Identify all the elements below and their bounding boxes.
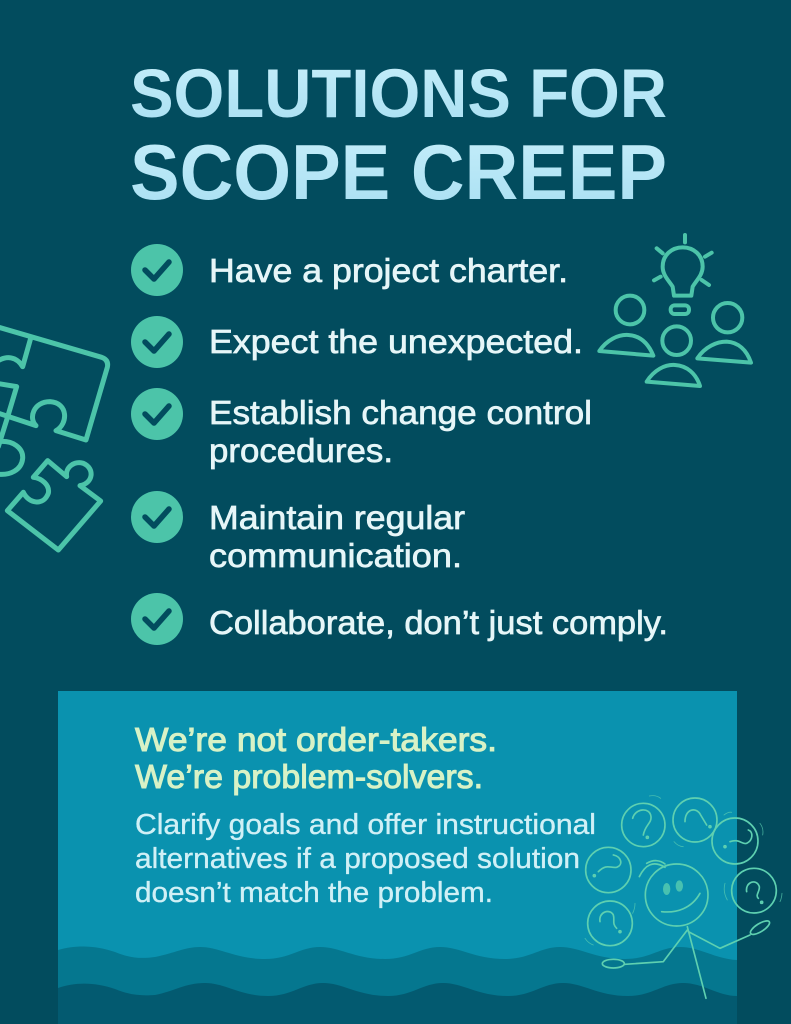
icon: stick figure juggling question marks bbox=[585, 796, 782, 998]
item 4: communication. bbox=[209, 537, 462, 574]
figure body and arms bbox=[602, 918, 771, 998]
icon: person right bbox=[697, 303, 751, 363]
icon: person left bbox=[599, 296, 653, 356]
bubble 4 bbox=[586, 847, 631, 893]
item 4: Maintain regular bbox=[209, 499, 465, 536]
title bbox=[130, 55, 667, 216]
bubble 3 bbox=[712, 818, 758, 864]
title: SOLUTIONS FOR bbox=[130, 55, 667, 132]
title: SCOPE CREEP bbox=[130, 128, 667, 216]
panel heading: We’re problem-solvers. bbox=[135, 758, 483, 795]
panel heading: We’re not order-takers. bbox=[135, 721, 497, 758]
item 5 bbox=[131, 593, 668, 645]
panel: problem-solvers bbox=[58, 691, 737, 1024]
icon: lightbulb and team bbox=[599, 235, 751, 386]
wave: lower bbox=[58, 983, 737, 1024]
item 1 bbox=[131, 244, 568, 296]
bubble 5 bbox=[588, 901, 632, 946]
icon: puzzle pieces bbox=[0, 327, 108, 550]
bubble 6 bbox=[732, 868, 776, 913]
bubble 1 bbox=[622, 803, 665, 847]
panel heading bbox=[135, 721, 497, 795]
item 3: procedures. bbox=[209, 432, 393, 469]
wave: upper bbox=[58, 946, 737, 1024]
motion ticks bbox=[585, 796, 782, 945]
icon: person center bbox=[647, 326, 700, 386]
panel body text: Clarify goals and offer instructional bbox=[135, 809, 596, 841]
figure head and face bbox=[639, 861, 708, 926]
item 3 bbox=[131, 388, 592, 469]
panel body text bbox=[135, 809, 596, 909]
item 2: Expect the unexpected. bbox=[209, 323, 583, 360]
panel body text: alternatives if a proposed solution bbox=[135, 843, 580, 875]
item 5: Collaborate, don’t just comply. bbox=[209, 604, 668, 641]
item 3: Establish change control bbox=[209, 394, 592, 431]
panel body text: doesn’t match the problem. bbox=[135, 877, 493, 909]
item 4 bbox=[131, 491, 465, 574]
item 2 bbox=[131, 316, 583, 368]
icon: lightbulb bbox=[654, 235, 712, 314]
checklist bbox=[131, 244, 668, 645]
item 1: Have a project charter. bbox=[209, 252, 568, 289]
bubble 2 bbox=[673, 798, 717, 842]
